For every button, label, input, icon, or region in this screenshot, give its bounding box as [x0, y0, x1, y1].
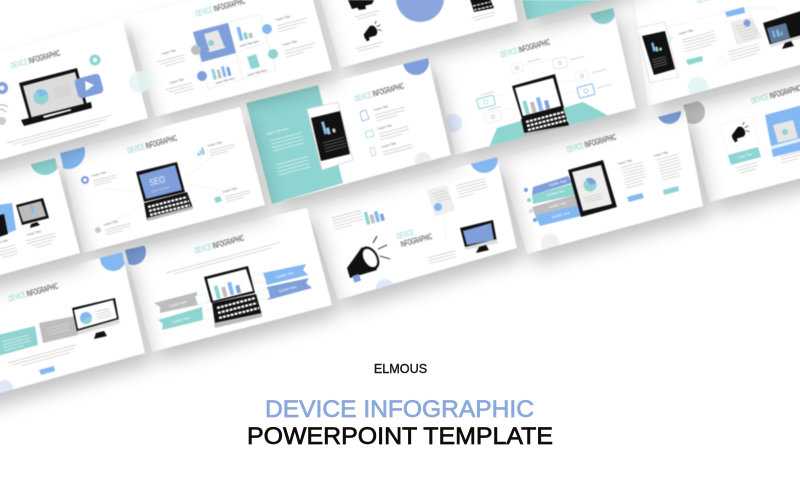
slide: teal panel and phone: DEVICE INFOGRAPHIC — [354, 82, 405, 104]
slide: document, monitor and big megaphone — [299, 145, 517, 300]
slide: laptop with connected boxes — [432, 0, 636, 160]
slide: tablet with stacked ribbons: DEVICE INFOGRAPHIC — [566, 133, 617, 155]
pale circle between slides — [129, 71, 151, 93]
slide: tablet with stacked ribbons — [498, 100, 703, 254]
slide: SEO laptop: Insert Title — [91, 170, 107, 178]
slide: tablet with stacked ribbons: Subtitle Here — [546, 189, 565, 197]
laptop with SEO screen: Insert Title Here — [151, 185, 171, 193]
grid of four cells: Insert Title Here — [207, 45, 227, 53]
icon: play button — [74, 73, 104, 99]
laptop — [19, 68, 92, 126]
slide: megaphone and document cards — [681, 62, 800, 202]
slide: document, monitor and big megaphone: DEVICE — [396, 229, 415, 242]
slide: teal panel and phone — [246, 49, 451, 204]
slide: far left teal half disc: Insert Title — [26, 229, 42, 237]
slide: laptop with play button: DEVICE INFOGRAPHIC — [10, 49, 61, 71]
grid of four cells: Insert Title Here — [215, 76, 236, 85]
heading: device infographic: DEVICE INFOGRAPHIC — [265, 396, 534, 423]
slide: SEO laptop: Insert Title — [103, 219, 119, 227]
icon: big megaphone — [347, 236, 390, 283]
slide: laptop with ribbons: Subtitle Here — [278, 285, 297, 293]
slide: phone, document and monitor: Insert Title — [678, 28, 694, 36]
slide: top 2x2 grid: Insert Title — [275, 14, 291, 22]
grid of four cells: Insert Title Here — [239, 39, 260, 48]
slide: tablet with stacked ribbons: Subtitle Here — [548, 201, 567, 209]
slide: top 2x2 grid: Insert Title — [282, 39, 298, 47]
heading: powerpoint template: POWERPOINT TEMPLATE — [247, 423, 553, 450]
slide: SEO laptop: Insert Title — [222, 186, 238, 194]
slide: teal panel and phone: Insert Title — [381, 141, 397, 149]
slide: teal panel and phone: Insert Title — [373, 104, 389, 112]
slide: SEO laptop: DEVICE INFOGRAPHIC — [127, 134, 178, 156]
slide: laptop with play button — [0, 19, 148, 171]
grid of four cells — [193, 14, 276, 89]
slide: tablet with stacked ribbons: Insert Title — [617, 158, 633, 166]
slide: SEO laptop — [51, 107, 265, 253]
slide: teal panel and phone: Insert Title Here — [266, 126, 289, 136]
slide: teal band remnant — [515, 0, 760, 20]
slide: tablet with stacked ribbons: Insert Title — [653, 150, 669, 158]
slide: laptop with ribbons: DEVICE INFOGRAPHIC — [194, 234, 245, 256]
brand name: ELMOUS — [374, 362, 427, 376]
slide: laptop with ribbons: Subtitle Here — [168, 300, 187, 308]
slide: bottom left monitor: DEVICE INFOGRAPHIC — [8, 282, 59, 304]
laptop with SEO screen — [136, 162, 193, 221]
slide: tablet with stacked ribbons: Subtitle Here — [551, 211, 570, 219]
grid of four cells: Insert Title Here — [247, 68, 268, 77]
laptop with SEO screen: SEO — [148, 173, 167, 188]
slide: top 2x2 grid: Insert Title — [161, 48, 177, 56]
slide: SEO laptop: Insert Title — [207, 140, 223, 148]
slide: phone, document and monitor — [633, 0, 800, 106]
slide: bottom left monitor — [0, 245, 145, 404]
slide: megaphone and document cards: Insert Title — [737, 152, 753, 160]
slide: laptop with connected boxes: DEVICE INFOGRAPHIC — [500, 38, 551, 60]
slide: laptop with ribbons — [120, 208, 332, 352]
slide: laptop with ribbons: Subtitle Here — [171, 316, 190, 324]
slide: teal panel and phone: Insert Title — [377, 123, 393, 131]
slide: top 2x2 grid: Insert Title — [169, 77, 185, 85]
slide: top circle and megaphone — [315, 0, 518, 68]
slide: document, monitor and big megaphone: INFOGRAPHIC — [400, 233, 433, 250]
slide: top 2x2 grid — [128, 0, 332, 117]
slide: far left teal half disc — [0, 145, 80, 286]
slide: laptop with ribbons: Subtitle Here — [275, 271, 294, 279]
slide: tablet with stacked ribbons: Subtitle Here — [548, 179, 567, 187]
